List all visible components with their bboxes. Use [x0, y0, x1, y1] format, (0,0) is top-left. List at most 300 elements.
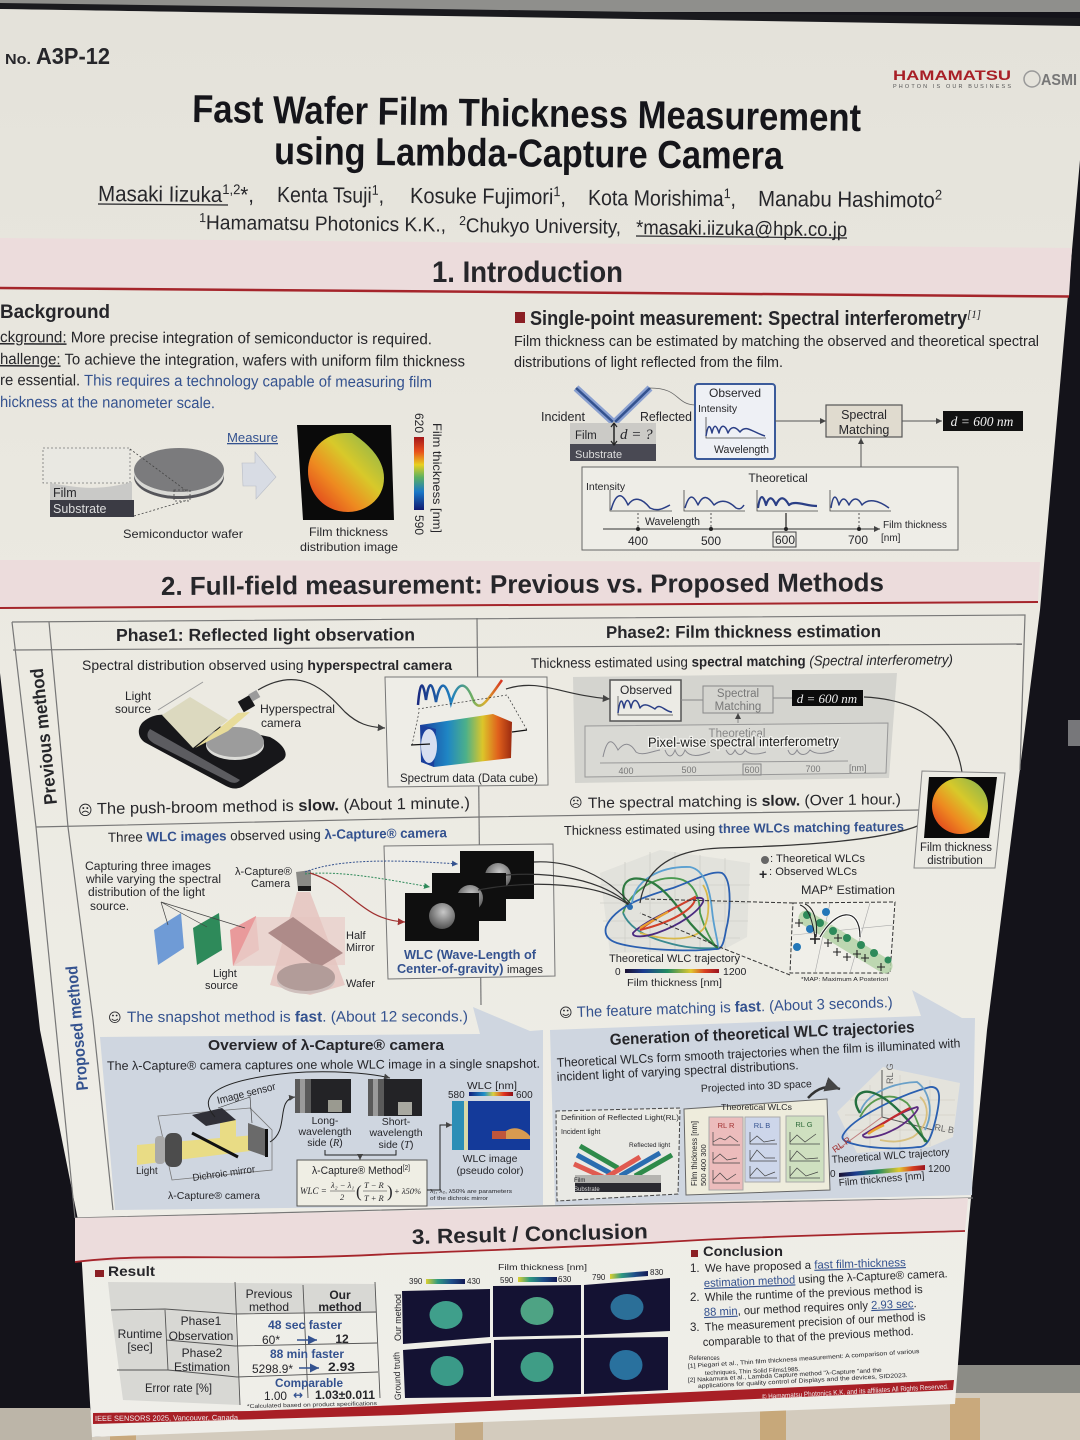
film beam diagram: Incident	[541, 409, 585, 424]
section 3 header band	[75, 1198, 968, 1262]
conclusion list: comparable to that of the previous method.	[703, 1326, 914, 1349]
conclusion: feature matching is fast: ☺	[559, 1006, 573, 1021]
RL R column: RL R	[718, 1121, 735, 1130]
references: [1] Piegari et al., Thin film thickness measurement: A comparison of various	[688, 1349, 920, 1370]
long-wavelength image: wavelength	[297, 1126, 352, 1138]
arrow: method to WLC image	[427, 1125, 452, 1190]
labels: light source and camera	[115, 689, 335, 730]
panel: background	[0, 302, 465, 554]
3D WLC trajectory plot: 1200	[723, 966, 747, 978]
film beam diagram	[541, 388, 695, 461]
blue panel background with arrow	[100, 1007, 543, 1210]
affiliations: Chukyo University,	[466, 215, 621, 239]
method formula box: T − R	[364, 1180, 385, 1190]
table text: 60*	[262, 1333, 280, 1347]
panel: generation of theoretical WLC trajectories	[550, 990, 975, 1205]
spectral matching box: Spectral	[841, 408, 887, 422]
labels: light source and camera: Light	[125, 689, 152, 703]
labels: optics: source	[205, 980, 238, 992]
WLC pseudo color image: 580	[448, 1090, 465, 1101]
background text: hickness at the nanometer scale.	[0, 394, 215, 412]
description: capturing three images	[85, 861, 221, 913]
camera schematic	[136, 1072, 390, 1202]
panel: previous method phase 1	[78, 657, 548, 819]
table text: Our	[329, 1288, 351, 1302]
faded theoretical box: 400	[618, 766, 634, 776]
colour bars: 590	[500, 1276, 514, 1285]
projected label and arrow	[701, 1078, 840, 1098]
formula note: of the dichroic mirror	[430, 1196, 488, 1202]
table text: 2.93	[328, 1360, 355, 1374]
observed box: Observed	[620, 683, 672, 697]
panel: film thickness result images	[391, 1262, 670, 1400]
footer red band: © Hamamatsu Photonics K.K. and its affiliates All Rights Reserved.	[762, 1383, 949, 1401]
WLC pseudo color image	[448, 1080, 533, 1177]
background text: hallenge: To achieve the integration, wafers with uniform film thickness	[0, 351, 465, 370]
arrow: plot to film distribution	[640, 795, 962, 903]
row label: our method: Our method	[393, 1294, 403, 1341]
colour bar: film thickness	[412, 413, 444, 535]
method formula box: [2]	[403, 1165, 410, 1172]
RL R column	[709, 1117, 743, 1190]
3D RL trajectory plot: RL B	[934, 1122, 955, 1135]
panel: conclusion	[688, 1243, 948, 1390]
row label: ground truth: Ground truth	[391, 1352, 403, 1400]
observed spectrum box: Intensity	[698, 403, 738, 415]
authors: Kenta Tsuji	[277, 182, 384, 208]
authors: Kota Morishima	[588, 185, 741, 211]
MAP estimation label: MAP* Estimation	[801, 883, 895, 897]
method formula box	[297, 1160, 427, 1206]
authors: *,	[240, 182, 254, 207]
wafer cross-section	[43, 448, 134, 517]
table text: ↔	[293, 1388, 303, 1402]
icon: push-broom conveyor	[139, 682, 286, 788]
WLC pseudo color image: 600	[516, 1090, 533, 1101]
authors: Manabu Hashimoto	[758, 186, 949, 213]
colour bar: film thickness: 620	[412, 413, 426, 433]
3D RL trajectory plot: Film thickness [nm]	[838, 1171, 925, 1189]
conclusion: snapshot is fast: ☺	[108, 1011, 122, 1026]
observed spectrum box: Wavelength	[714, 444, 769, 456]
table text: Previous	[246, 1287, 292, 1301]
long-wavelength image: Long-	[312, 1115, 339, 1127]
colour bars: 390	[409, 1277, 423, 1286]
legend: theoretical and observed WLCs	[759, 853, 866, 882]
subheading: Spectral distribution observed using hyperspectral camera	[82, 657, 452, 673]
authors: Masaki Iizuka	[98, 181, 231, 207]
faded theoretical box	[585, 723, 888, 777]
result box: d = 600 nm	[797, 691, 857, 706]
authors	[98, 180, 942, 213]
references: [2] Nakamura et al., Lambda Capture method "λ-Capture "and the	[688, 1368, 883, 1384]
grey flow panel	[573, 673, 897, 783]
theoretical spectra box: Intensity	[586, 481, 626, 493]
table text: 88 min faster	[270, 1347, 344, 1361]
labels: optics: Half	[346, 930, 367, 942]
method formula box: λ₂ − λ₁	[330, 1180, 354, 1190]
arrows: WLC images to plot	[478, 862, 633, 910]
description: The λ-Capture® camera captures one whole WLC image in a single snapshot.	[107, 1057, 540, 1073]
theoretical WLCs table: Film thickness [nm]	[690, 1121, 699, 1186]
definition of reflected light	[556, 1108, 680, 1201]
theoretical spectra box: 600	[775, 533, 795, 547]
labels: light source and camera: camera	[261, 716, 301, 730]
footer red band: IEEE SENSORS 2025, Vancouver, Canada	[95, 1413, 239, 1423]
arrow: camera to data cube	[258, 680, 385, 728]
WLC pseudo color image: (pseudo color)	[456, 1165, 524, 1177]
subheading: Three WLC images observed using λ-Capture® camera	[108, 825, 447, 845]
table text: 48 sec faster	[268, 1318, 342, 1332]
film thickness distribution output: Film thickness	[920, 842, 992, 854]
footer red band	[93, 1380, 954, 1424]
affiliations: *masaki.iizuka@hpk.co.jp	[636, 217, 847, 241]
title	[192, 88, 861, 178]
short-wavelength image: Short-	[382, 1116, 411, 1128]
conclusion list: While the runtime of the previous method is	[705, 1284, 923, 1304]
wafer cross-section: Substrate	[53, 502, 107, 516]
table text: Runtime	[118, 1327, 163, 1341]
3D RL trajectory plot	[830, 1063, 960, 1189]
authors: 2	[935, 186, 942, 203]
conclusion: snapshot is fast: The snapshot method is fast. (About 12 seconds.)	[127, 1008, 468, 1026]
row label: proposed method: Proposed method	[63, 965, 92, 1091]
arrow: theoretical to matching	[860, 438, 862, 467]
section 2 header band: 2. Full-field measurement: Previous vs. Proposed Methods	[161, 567, 884, 601]
authors: ,	[379, 183, 384, 208]
description: capturing three images: distribution of the light	[88, 887, 206, 899]
logos: HAMAMATSU	[893, 67, 1011, 83]
label: pixel-wise interferometry: Pixel-wise spectral interferometry	[648, 734, 839, 750]
colour bar: film thickness: Film thickness [nm]	[430, 423, 444, 533]
short-wavelength image: side (T)	[378, 1139, 414, 1151]
3D RL trajectory plot: 0	[830, 1169, 836, 1180]
faded theoretical box: 600	[744, 765, 760, 775]
RL B column: RL B	[754, 1121, 770, 1130]
film thickness distribution output: distribution	[927, 855, 983, 867]
row label: previous method: Previous method	[27, 667, 61, 806]
method formula box: (	[356, 1182, 362, 1201]
description: incident light of varying spectral distributions.	[556, 1058, 799, 1084]
camera schematic: Dichroic mirror	[192, 1164, 256, 1184]
conclusion: push-broom is slow: The push-broom method is slow. (About 1 minute.)	[97, 795, 470, 818]
references: References	[689, 1356, 720, 1362]
caption: distribution image	[300, 525, 398, 554]
film beam diagram: d = ?	[620, 427, 653, 443]
table text: method	[318, 1300, 362, 1314]
measure label: Measure	[227, 430, 278, 445]
MAP footnote: *MAP: Maximum A Posteriori	[801, 977, 888, 983]
section 2 header band	[0, 560, 1040, 608]
heading: single-point: [1]	[967, 307, 981, 321]
arrow: observed to matching	[775, 420, 826, 422]
description: capturing three images: while varying the spectral	[85, 874, 221, 886]
definition of reflected light: Reflected light	[629, 1142, 670, 1149]
conclusion list: 1.	[690, 1263, 700, 1275]
description: capturing three images: source.	[90, 901, 129, 913]
panel: overview of lambda-capture camera	[100, 1007, 543, 1210]
wafer cross-section: Film	[53, 486, 77, 500]
colour bars: 790	[592, 1273, 606, 1282]
table cells	[108, 1282, 380, 1405]
3D WLC trajectory plot: 0	[615, 967, 621, 978]
observed box	[610, 680, 681, 721]
table text: Observation	[169, 1329, 233, 1343]
poster number: No.	[5, 51, 31, 68]
method formula box: λ-Capture® Method	[312, 1165, 408, 1177]
affiliations: Hamamatsu Photonics K.K.,	[206, 212, 446, 237]
table text: Error rate [%]	[145, 1381, 212, 1395]
panel: proposed method phase 1	[85, 825, 555, 1026]
panel: result table	[95, 1263, 380, 1410]
method formula box: 2	[340, 1192, 345, 1202]
table text: Phase2	[182, 1346, 223, 1360]
table text	[118, 1287, 375, 1403]
camera schematic: λ-Capture® camera	[168, 1191, 260, 1202]
legend: theoretical and observed WLCs: +	[759, 866, 767, 882]
table text: 12	[335, 1332, 349, 1346]
description	[514, 334, 1039, 371]
long-wavelength image: side (R)	[307, 1137, 343, 1149]
section 3 header band: 3. Result / Conclusion	[412, 1220, 648, 1249]
method formula box: WLC =	[300, 1186, 327, 1196]
film beam diagram: Film	[575, 430, 597, 442]
theoretical spectra box: 700	[848, 533, 868, 547]
conclusion list: estimation method using the λ-Capture® camera.	[704, 1268, 948, 1290]
3D WLC trajectory plot	[600, 850, 750, 989]
data cube box	[385, 677, 548, 787]
panel: previous method phase 2	[506, 651, 963, 812]
authors: 1,2	[222, 181, 241, 197]
WLC pseudo color image: WLC image	[463, 1153, 518, 1165]
WLC pseudo color image: WLC [nm]	[467, 1080, 517, 1092]
arrow: matching to result	[902, 420, 942, 422]
3D RL trajectory plot: RL R	[830, 1135, 853, 1155]
heading: conclusion: Conclusion	[703, 1243, 783, 1259]
conclusion list: The measurement precision of our method is	[705, 1311, 926, 1334]
colour bar: film thickness: 590	[412, 515, 426, 535]
conclusion: feature matching is fast: The feature matching is fast. (About 3 seconds.)	[577, 994, 893, 1021]
method formula box: T + R	[364, 1193, 385, 1203]
caption: distribution image: distribution image	[300, 540, 398, 554]
colour bars	[409, 1262, 664, 1286]
spectral matching box	[826, 405, 902, 437]
subheading: Thickness estimated using three WLCs matching features	[564, 819, 904, 838]
image grid	[402, 1278, 670, 1398]
long-wavelength image	[295, 1079, 352, 1149]
background text: ckground: More precise integration of semiconductor is required.	[0, 329, 432, 348]
panel: single-point measurement	[514, 307, 1039, 550]
MAP estimation inset	[640, 899, 895, 975]
short-wavelength image	[368, 1079, 423, 1151]
theoretical spectra box: 500	[701, 534, 721, 548]
colour bars: 630	[558, 1275, 572, 1284]
film beam diagram: Substrate	[575, 449, 622, 461]
faded matching box	[681, 686, 792, 723]
references: techniques, Thin Solid Films1985.	[705, 1367, 800, 1377]
method formula box: )	[387, 1182, 393, 1201]
labels: optics: Light	[213, 968, 237, 980]
logos	[893, 67, 1077, 90]
3D RL trajectory plot: Theoretical WLC trajectory	[831, 1146, 951, 1166]
conclusion list	[690, 1257, 948, 1349]
heading: Overview of λ-Capture® camera	[208, 1037, 445, 1054]
table text: Estimation	[174, 1360, 230, 1374]
title: Fast Wafer Film Thickness Measurement	[192, 88, 861, 140]
theoretical spectra box: Theoretical	[748, 471, 808, 485]
description	[556, 1036, 961, 1084]
labels: optics: Mirror	[346, 942, 375, 954]
description: distributions of light reflected from the film.	[514, 355, 783, 371]
description: capturing three images: Capturing three images	[85, 861, 211, 873]
colour bars: Film thickness [nm]	[498, 1262, 587, 1272]
film beam diagram: Reflected	[640, 409, 692, 424]
definition of reflected light: Film	[574, 1178, 585, 1184]
faded matching box: Spectral	[717, 688, 759, 700]
spectral matching box: Matching	[839, 423, 889, 437]
coloured filters	[154, 902, 259, 966]
authors: Kosuke Fujimori	[410, 183, 568, 209]
arrow: measure	[242, 452, 276, 499]
comparison table grid	[12, 615, 1025, 1218]
caption: distribution image: Film thickness	[309, 525, 388, 539]
data cube box: Spectrum data (Data cube)	[400, 771, 538, 785]
labels: optics: Wafer	[346, 978, 375, 990]
conclusion: push-broom is slow: ☹	[78, 803, 93, 819]
faded theoretical box: [nm]	[849, 763, 867, 773]
result box	[943, 411, 1023, 431]
bracket arrow to method box	[325, 1150, 396, 1160]
RL G column: RL G	[795, 1120, 813, 1129]
colour bars: 830	[650, 1268, 664, 1277]
table text: method	[249, 1300, 289, 1314]
theoretical spectra box: 400	[628, 534, 648, 548]
authors: 1	[553, 183, 561, 199]
observed spectrum box	[695, 384, 775, 459]
logos: ASMI	[1041, 72, 1077, 89]
theoretical WLCs table: Theoretical WLCs	[721, 1103, 792, 1112]
section 1 header band: 1. Introduction	[432, 256, 623, 289]
arrow: data cube to observed	[506, 685, 610, 699]
affiliations: 2	[459, 213, 466, 228]
arrows: camera to WLC images	[305, 861, 458, 922]
panel: proposed method phase 2	[478, 795, 962, 1021]
theoretical WLCs table: 500 400 300	[699, 1144, 708, 1186]
legend: theoretical and observed WLCs: : Theoretical WLCs	[770, 853, 866, 865]
camera schematic: Light	[136, 1166, 158, 1177]
table text: 1.00	[264, 1389, 287, 1403]
caption: semiconductor wafer: Semiconductor wafer	[123, 527, 243, 541]
method formula box: + λ50%	[394, 1186, 421, 1196]
icon: wafer	[130, 448, 224, 516]
labels: light source and camera: Hyperspectral	[260, 702, 335, 716]
heading: Generation of theoretical WLC trajectories	[609, 1019, 915, 1049]
background text	[0, 329, 465, 412]
formula note	[430, 1189, 512, 1202]
WLC images box	[384, 844, 555, 979]
heading: single-point: Single-point measurement: Spectral interferometry	[530, 308, 1013, 330]
authors: ,	[731, 186, 736, 211]
arrow: result to distribution	[864, 697, 963, 782]
result box: d = 600 nm	[951, 414, 1014, 429]
heading: result: Result	[108, 1263, 155, 1279]
affiliations	[199, 210, 847, 241]
RL G column	[786, 1116, 824, 1182]
formula note: λ₁, λ₂, λ50% are parameters	[430, 1189, 512, 1195]
film thickness distribution image	[297, 425, 394, 520]
table footnote: *Calculated based on product specifications	[247, 1401, 377, 1410]
legend: theoretical and observed WLCs: : Observed WLCs	[769, 866, 857, 878]
faded theoretical box: Theoretical	[709, 728, 765, 740]
camera schematic: Image sensor	[216, 1081, 277, 1107]
RL B column	[745, 1117, 780, 1182]
labels: optics: Camera	[251, 878, 291, 890]
table text: [sec]	[127, 1340, 153, 1354]
description: Theoretical WLCs form smooth trajectories when the film is illuminated with	[556, 1036, 961, 1070]
labels: optics: λ-Capture®	[235, 866, 292, 878]
conclusion list: 3.	[690, 1322, 700, 1334]
background text: re essential. This requires a technology capable of measuring film	[0, 372, 432, 391]
definition of reflected light: Substrate	[574, 1187, 600, 1193]
3D RL trajectory plot: RL G	[885, 1063, 895, 1084]
logos: PHOTON IS OUR BUSINESS	[893, 84, 1011, 90]
3D WLC trajectory plot: Theoretical WLC trajectory	[609, 953, 740, 965]
theoretical spectra box: Film thickness	[883, 520, 947, 531]
theoretical spectra box: Wavelength	[645, 516, 700, 528]
poster number: A3P-12	[36, 43, 110, 69]
3D WLC trajectory plot: Film thickness [nm]	[627, 977, 722, 989]
observed spectrum box: Observed	[709, 386, 761, 400]
labels: light source and camera: source	[115, 702, 151, 716]
conclusion: matching is slow: The spectral matching is slow. (Over 1 hour.)	[588, 791, 901, 812]
table text: Comparable	[275, 1376, 343, 1390]
table text: 1.03±0.011	[315, 1388, 375, 1402]
references: applications for quality control of Displays and the devices, SID2023.	[698, 1373, 908, 1390]
short-wavelength image: wavelength	[368, 1127, 423, 1139]
definition of reflected light: Incident light	[561, 1129, 600, 1136]
colour bars: 430	[467, 1277, 481, 1286]
projected label and arrow: Projected into 3D space	[701, 1078, 812, 1095]
WLC images box: Center-of-gravity) images	[397, 962, 543, 976]
definition of reflected light: Definition of Reflected Light(RL)	[561, 1113, 680, 1122]
faded theoretical box: 500	[681, 765, 697, 775]
heading: background: Background	[0, 302, 110, 323]
authors: 1	[372, 182, 379, 198]
authors: 1	[724, 185, 731, 201]
faded theoretical box: 700	[805, 764, 821, 774]
theoretical spectra box	[582, 467, 958, 550]
affiliations: 1	[199, 210, 206, 225]
references	[688, 1349, 920, 1390]
WLC images box: WLC (Wave-Length of	[404, 948, 537, 962]
heading: phase 1: Phase1: Reflected light observation	[116, 624, 415, 645]
conclusion list: 88 min, our method requires only 2.93 sec.	[704, 1298, 917, 1319]
table text: Phase1	[181, 1314, 222, 1328]
conclusion list: We have proposed a fast film-thickness	[705, 1257, 906, 1275]
title: using Lambda-Capture Camera	[274, 130, 784, 178]
faded matching box: Matching	[715, 701, 761, 713]
film thickness distribution output	[914, 771, 1005, 868]
3D RL trajectory plot: 1200	[928, 1164, 951, 1175]
theoretical WLCs table	[684, 1099, 830, 1195]
description: Film thickness can be estimated by matching the observed and theoretical spectral	[514, 334, 1039, 350]
light paths and optics	[233, 870, 345, 995]
conclusion: matching is slow: ☹	[569, 796, 583, 811]
conclusion list: 2.	[690, 1292, 700, 1304]
authors: ,	[560, 184, 566, 209]
poster number	[5, 43, 110, 69]
section 1 header band	[0, 238, 1072, 296]
